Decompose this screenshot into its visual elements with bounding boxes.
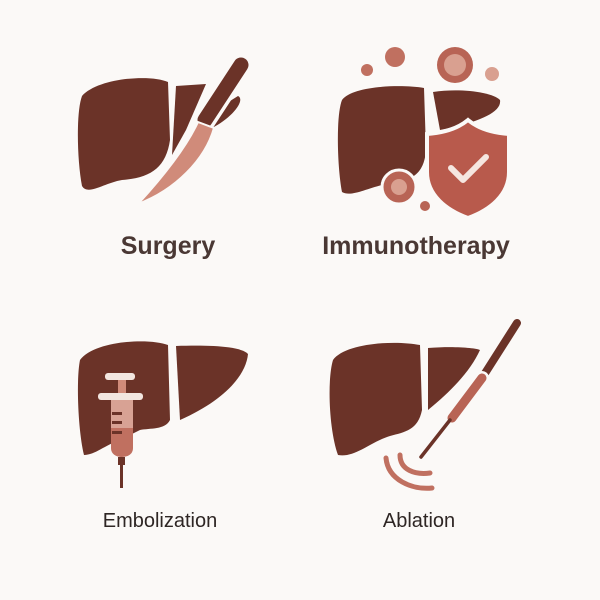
icon: cells bbox=[361, 47, 499, 211]
icon: liver ablation bbox=[330, 323, 517, 488]
icon: liver surgery bbox=[78, 65, 241, 204]
icon: waves bbox=[386, 455, 432, 488]
icon: liver embolization bbox=[78, 341, 248, 488]
label: Embolization: Embolization bbox=[103, 510, 217, 532]
panel: surgery bbox=[78, 65, 241, 260]
icon: scalpel bbox=[138, 65, 241, 204]
panel: embolization bbox=[78, 341, 248, 532]
label: Immunotherapy: Immunotherapy bbox=[322, 232, 510, 260]
label: Surgery: Surgery bbox=[121, 232, 215, 260]
panel: immunotherapy bbox=[322, 47, 510, 260]
icon: syringe bbox=[98, 373, 143, 488]
panel: ablation bbox=[330, 323, 517, 532]
icon: ablation probe bbox=[421, 323, 517, 457]
label: Ablation: Ablation bbox=[383, 510, 455, 532]
icon: liver immunotherapy bbox=[338, 47, 509, 218]
icon: shield bbox=[427, 120, 509, 218]
